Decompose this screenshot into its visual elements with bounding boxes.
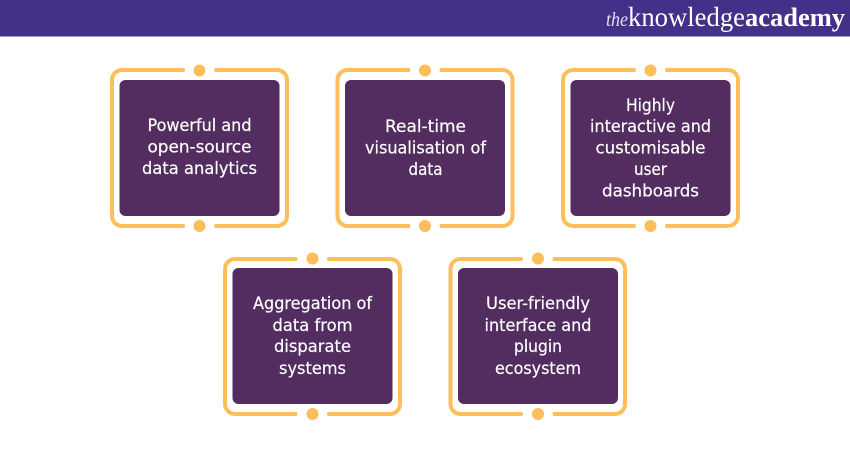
card: plugin ecosystem xyxy=(450,252,625,420)
logo: the knowledge academy: academy xyxy=(745,3,845,32)
card: interactive dashboards: dashboards xyxy=(602,182,699,200)
logo: the knowledge academy: knowledge xyxy=(628,2,745,32)
card: plugin ecosystem: plugin xyxy=(514,337,562,356)
header banner xyxy=(0,0,850,36)
logo: the knowledge academy: the xyxy=(606,9,628,31)
card: plugin ecosystem: User-friendly xyxy=(486,294,590,313)
card: data aggregation: Aggregation of xyxy=(253,294,373,313)
card: real-time visualisation: visualisation of xyxy=(365,138,487,158)
card: powerful analytics xyxy=(112,64,287,232)
card: interactive dashboards: customisable xyxy=(596,138,706,158)
card: plugin ecosystem: ecosystem xyxy=(495,359,581,378)
card: data aggregation: data from xyxy=(272,316,352,335)
card: powerful analytics: open-source xyxy=(148,138,252,156)
card: data aggregation: systems xyxy=(279,359,346,378)
card: real-time visualisation: data xyxy=(408,160,442,179)
card: real-time visualisation: Real-time xyxy=(385,117,466,136)
card: data aggregation: disparate xyxy=(274,337,351,356)
logo: the knowledge academy xyxy=(606,2,845,32)
card: powerful analytics: Powerful and xyxy=(148,116,252,135)
card: real-time visualisation xyxy=(338,64,512,232)
card: plugin ecosystem: interface and xyxy=(484,316,592,335)
card: interactive dashboards xyxy=(563,64,738,232)
card: data aggregation xyxy=(225,252,400,420)
card: interactive dashboards: Highly xyxy=(626,96,675,115)
card: powerful analytics: data analytics xyxy=(142,159,257,178)
card: interactive dashboards: interactive and xyxy=(590,117,711,136)
card: interactive dashboards: user xyxy=(634,160,667,179)
